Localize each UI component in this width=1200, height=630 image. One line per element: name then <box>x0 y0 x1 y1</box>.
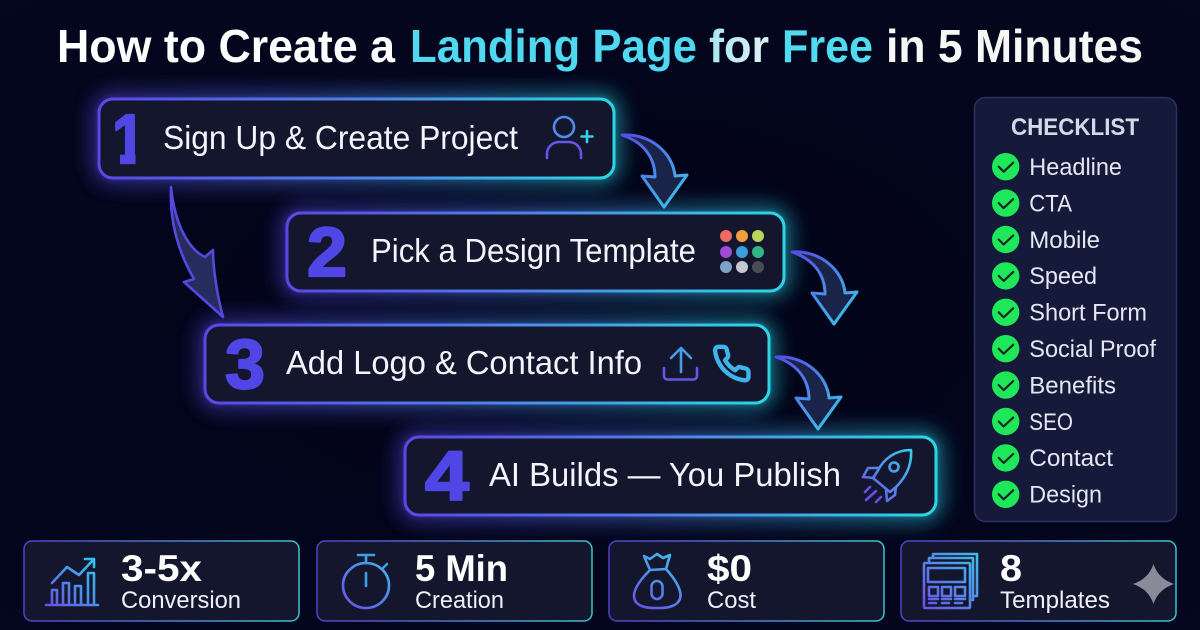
step 4 card <box>405 437 936 515</box>
step 2 label: Pick a Design Template <box>371 232 696 269</box>
stat label: Creation <box>415 587 504 614</box>
step 4 number: 4 <box>425 437 469 515</box>
stat card: creation time <box>317 541 592 621</box>
icon: growth chart <box>46 559 98 605</box>
arrow: step 3 to step 4 <box>776 357 841 429</box>
panel: checklist <box>974 98 1176 522</box>
step 3 number: 3 <box>225 325 265 403</box>
title: Free <box>782 20 873 72</box>
icon: rocket <box>863 450 911 502</box>
title: for <box>709 20 769 72</box>
item: Benefits: Benefits <box>1029 372 1116 399</box>
stat value: 5 Min <box>415 548 508 589</box>
item: Benefits <box>992 371 1116 399</box>
step 2 card <box>287 213 784 291</box>
stat card: conversion <box>24 541 299 621</box>
item: Social Proof: Social Proof <box>1029 336 1156 363</box>
item: Contact <box>992 444 1113 472</box>
title: How to Create a <box>57 20 395 72</box>
item: Speed: Speed <box>1029 263 1097 290</box>
step 4 label: AI Builds — You Publish <box>489 456 841 493</box>
item: SEO <box>992 408 1073 436</box>
stat label: Conversion <box>121 587 241 614</box>
item: CTA <box>992 189 1072 217</box>
arrow: step 1 to step 3 <box>171 187 223 317</box>
checklist heading: CHECKLIST <box>1011 114 1139 141</box>
icon: stopwatch <box>343 555 389 608</box>
step 3 card <box>205 325 769 403</box>
title: in 5 Minutes <box>886 20 1143 72</box>
icon: add user <box>547 117 592 158</box>
step 1 card <box>99 99 614 178</box>
icon: upload <box>664 348 697 380</box>
item: SEO: SEO <box>1029 409 1073 436</box>
item: Headline <box>992 153 1122 181</box>
item: Speed <box>992 262 1097 290</box>
step 3 label: Add Logo & Contact Info <box>286 344 642 381</box>
step 2 number: 2 <box>307 213 347 291</box>
item: Design: Design <box>1029 482 1102 509</box>
stat card: cost <box>609 541 884 621</box>
item: Design <box>992 481 1102 509</box>
title: Landing Page <box>410 20 697 72</box>
item: CTA: CTA <box>1029 190 1072 217</box>
item: Mobile: Mobile <box>1029 227 1100 254</box>
step 1 number: 1 <box>112 100 145 178</box>
item: Headline: Headline <box>1029 154 1122 181</box>
title <box>57 20 1143 72</box>
stat value: 3-5x <box>121 548 202 589</box>
icon: template stack <box>924 554 977 608</box>
stat card: templates <box>901 541 1176 621</box>
icon: colour palette dots <box>720 230 764 273</box>
item: Short Form: Short Form <box>1029 300 1147 327</box>
icon: money bag <box>634 554 681 608</box>
stat label: Cost <box>707 587 756 614</box>
item: Mobile <box>992 226 1100 254</box>
step 1 label: Sign Up & Create Project <box>163 119 518 156</box>
arrow: step 1 to step 2 <box>622 135 687 207</box>
item: Contact: Contact <box>1029 445 1113 472</box>
stat value: $0 <box>707 548 752 589</box>
icon: phone <box>715 347 748 380</box>
stat value: 8 <box>1000 548 1022 589</box>
arrow: step 2 to step 3 <box>792 252 857 324</box>
stat label: Templates <box>1000 587 1110 614</box>
icon: sparkle <box>1133 564 1174 604</box>
